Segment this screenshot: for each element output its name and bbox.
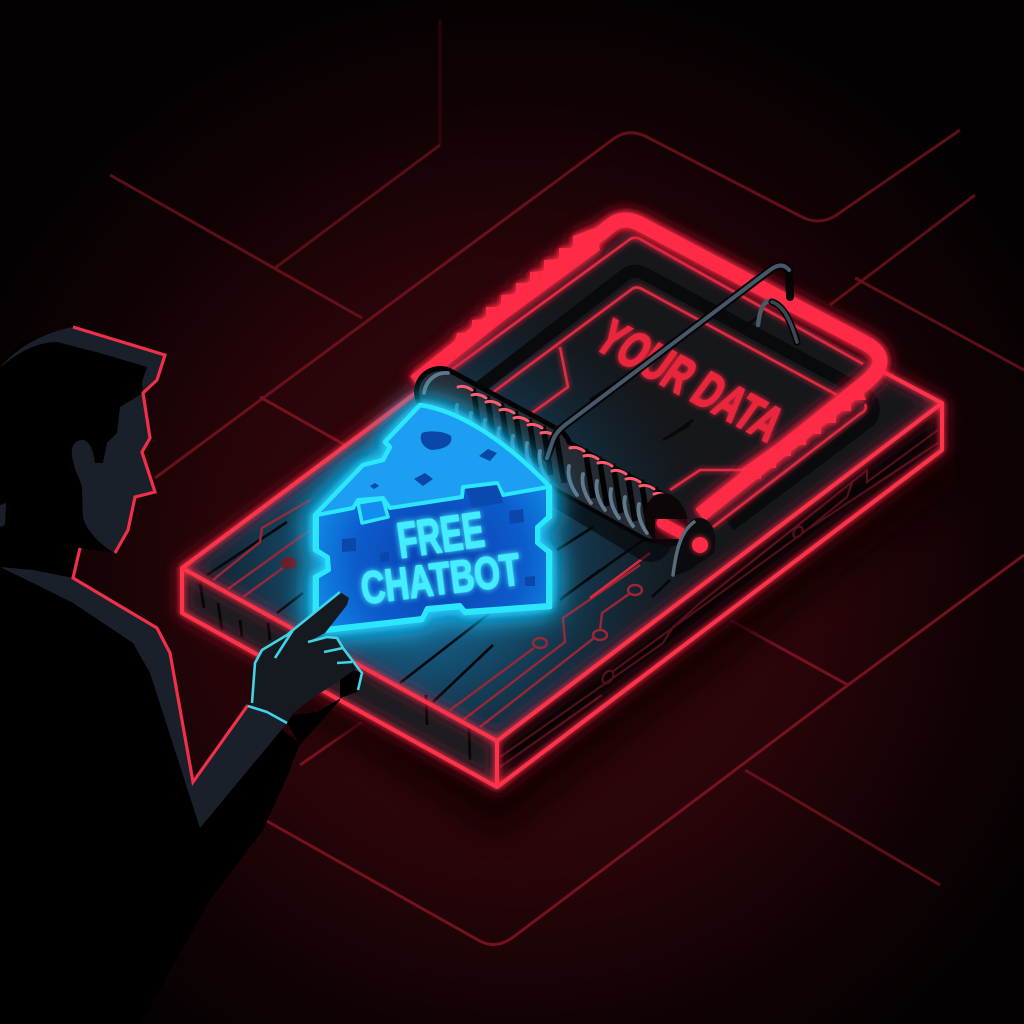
left coil bbox=[440, 392, 547, 450]
face bbox=[72, 393, 155, 553]
person silhouette bbox=[0, 327, 362, 1024]
side circuit bbox=[500, 430, 938, 767]
pivot light bbox=[692, 537, 708, 553]
shoulder rim bbox=[0, 567, 287, 828]
cheese body with glow bbox=[315, 405, 550, 631]
hand cyan outline bbox=[248, 592, 362, 723]
cheese holes bbox=[342, 431, 535, 586]
spring coils bbox=[424, 373, 693, 552]
right teeth bbox=[740, 385, 866, 479]
board top face bbox=[182, 230, 942, 741]
board traces bbox=[213, 500, 650, 727]
board shadow bbox=[220, 420, 960, 835]
board side right bbox=[497, 403, 942, 787]
board outline bbox=[182, 370, 942, 787]
blue glow on board bbox=[182, 230, 942, 741]
side grain bbox=[200, 583, 470, 760]
hand bbox=[248, 592, 362, 745]
cheese notch dark bbox=[466, 485, 503, 508]
coil ribs right bbox=[568, 447, 677, 544]
coil ribs left bbox=[456, 386, 564, 483]
cheese label CHATBOT: CHATBOT bbox=[358, 544, 523, 614]
hand shadow bbox=[287, 665, 362, 745]
red outline bbox=[73, 327, 248, 782]
staple bbox=[758, 301, 797, 342]
hand shape bbox=[250, 592, 358, 722]
glowing axle bbox=[662, 523, 684, 535]
trap hammer frame bbox=[415, 220, 880, 515]
coil end cap bbox=[639, 488, 693, 552]
body black bbox=[0, 327, 300, 1024]
inner panel red outline bbox=[447, 238, 866, 527]
left coil cap bbox=[424, 373, 448, 393]
coil outline bbox=[440, 392, 655, 517]
cheese raised notch bbox=[358, 499, 388, 523]
bracket bbox=[672, 518, 715, 577]
pivot and bracket bbox=[662, 518, 715, 577]
left teeth bbox=[450, 228, 600, 360]
kill bar wire bbox=[547, 266, 790, 458]
label: YOUR DATA: YOUR DATA bbox=[585, 309, 795, 452]
frame bar bbox=[415, 220, 880, 515]
hair rim bbox=[0, 327, 165, 393]
coil shadow bbox=[548, 478, 650, 540]
cheese bbox=[315, 405, 550, 631]
cheese front face bbox=[317, 483, 548, 629]
groove and wood grain bbox=[207, 271, 873, 702]
right coil bbox=[563, 466, 655, 517]
mousetrap board bbox=[182, 230, 942, 787]
board side left bbox=[182, 568, 497, 787]
left sliver bbox=[0, 503, 6, 527]
cheese label FREE: FREE bbox=[394, 501, 488, 569]
